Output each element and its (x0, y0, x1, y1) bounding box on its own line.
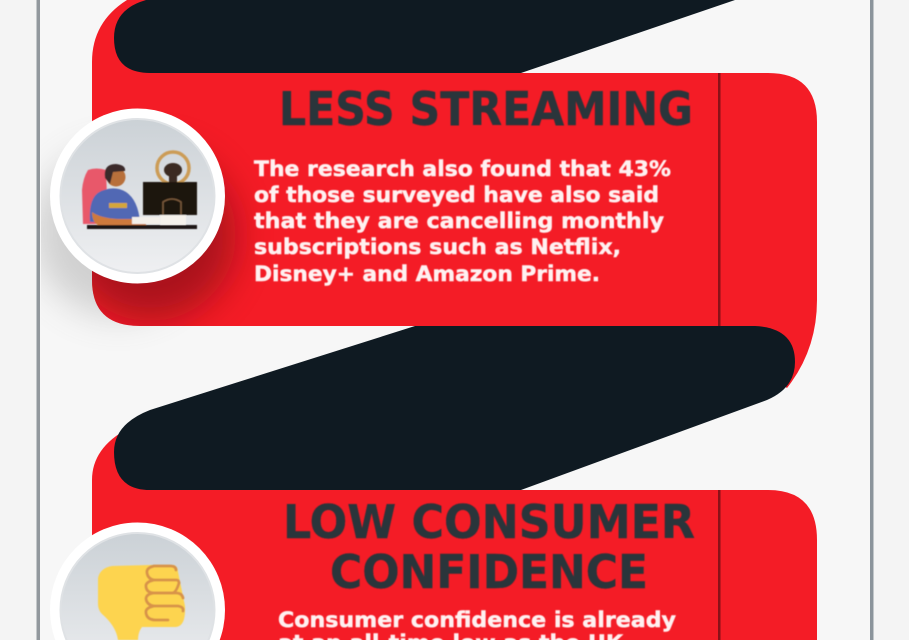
dark ribbon fold: top (114, 0, 735, 73)
text block: streaming research (254, 157, 671, 286)
icon: streamer at desktop badge (50, 108, 225, 284)
text block: streaming research: that they are cancelling monthly (254, 209, 664, 233)
icon: thumbs down (98, 565, 185, 640)
dark ribbon fold: middle (114, 326, 795, 490)
shadow under first icon (64, 149, 236, 321)
panel: low consumer confidence red ribbon (92, 400, 817, 640)
heading: less streaming: LESS STREAMING (279, 82, 693, 136)
text block: streaming research: Disney+ and Amazon Prime. (254, 262, 600, 286)
divider line: second panel (718, 490, 720, 640)
text block: streaming research: The research also found that 43% (254, 157, 671, 181)
text block: streaming research: subscriptions such as Netflix, (254, 235, 621, 259)
text block: consumer confidence: Consumer confidence is already (278, 608, 676, 632)
icon: thumbs down badge (50, 522, 225, 640)
text block: streaming research: of those surveyed have also said (254, 183, 659, 207)
icon: monitor and ring light (143, 152, 197, 225)
heading: low consumer confidence: CONFIDENCE (330, 545, 648, 599)
heading: low consumer confidence: LOW CONSUMER (283, 495, 695, 549)
panel: less streaming red ribbon (92, 0, 817, 388)
icon: streamer (82, 164, 197, 229)
shadow on background (41, 156, 137, 328)
divider line: first panel (718, 73, 720, 326)
heading: low consumer confidence (283, 495, 695, 599)
